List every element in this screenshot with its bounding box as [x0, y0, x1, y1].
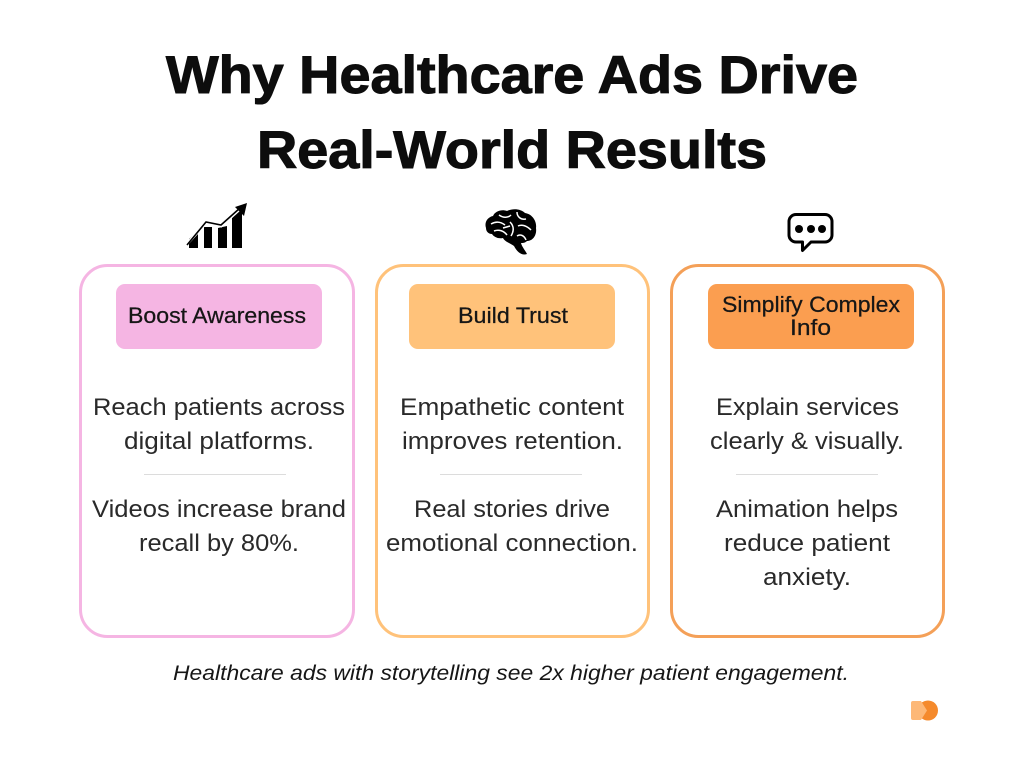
heading pill: boost awareness	[116, 284, 322, 349]
panel: simplify complex info	[672, 266, 944, 636]
heading pill: build trust: Build Trust	[458, 303, 568, 328]
heading pill: boost awareness: Boost Awareness	[128, 303, 306, 328]
text: videos recall: recall by 80%.	[139, 530, 299, 557]
heading pill: simplify complex info: Simplify Complex	[722, 292, 900, 317]
icon: brain	[485, 209, 536, 255]
icon: rising bar chart with arrow	[185, 203, 247, 248]
text: reach patients	[93, 394, 345, 455]
text: animation helps: anxiety.	[763, 564, 851, 591]
icon: chat bubble	[789, 214, 832, 250]
text: real stories: Real stories drive	[414, 496, 610, 523]
text: animation helps	[716, 496, 898, 591]
text: animation helps: Animation helps	[716, 496, 898, 523]
text: explain services	[710, 394, 904, 455]
text: empathetic content: improves retention.	[402, 428, 623, 455]
text: videos recall	[92, 496, 346, 557]
text: videos recall: Videos increase brand	[92, 496, 346, 523]
heading pill: build trust	[409, 284, 615, 349]
heading pill: simplify complex info	[708, 284, 914, 349]
text: reach patients: Reach patients across	[93, 394, 345, 421]
text: real stories	[386, 496, 638, 557]
text: real stories: emotional connection.	[386, 530, 638, 557]
title: Why Healthcare Ads Drive	[166, 46, 858, 105]
text: explain services: Explain services	[716, 394, 899, 421]
footer note: Healthcare ads with storytelling see 2x higher patient engagement.	[173, 661, 849, 685]
text: explain services: clearly & visually.	[710, 428, 904, 455]
panel: boost awareness	[80, 266, 354, 636]
text: empathetic content: Empathetic content	[400, 394, 624, 421]
panel: build trust	[376, 266, 648, 636]
logo mark	[911, 700, 938, 720]
heading pill: simplify complex info: Info	[790, 315, 831, 340]
text: animation helps: reduce patient	[724, 530, 890, 557]
title: Real-World Results	[257, 121, 767, 180]
text: empathetic content	[400, 394, 624, 455]
title	[166, 46, 858, 180]
text: reach patients: digital platforms.	[124, 428, 314, 455]
